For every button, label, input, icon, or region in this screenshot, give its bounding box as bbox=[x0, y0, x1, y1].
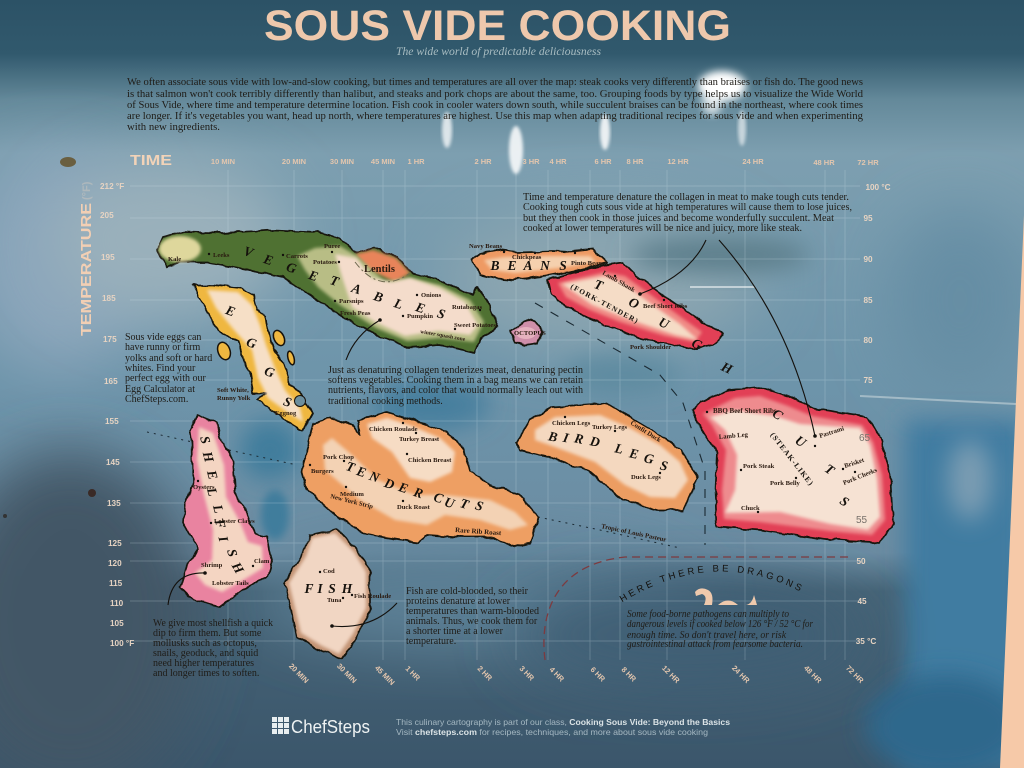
island: vegetables: Rutabagas bbox=[452, 304, 482, 311]
island: tough (fork-tender): G bbox=[689, 335, 705, 353]
island: tender cuts: U bbox=[442, 494, 458, 512]
temperature axis right bbox=[856, 183, 891, 646]
leader lines bbox=[168, 240, 817, 628]
time axis top: 4 HR bbox=[549, 157, 567, 166]
island: tender cuts: New York Strip bbox=[330, 493, 374, 511]
island: fish bbox=[285, 529, 391, 659]
text: shellfish note: and longer times to soften. bbox=[153, 668, 259, 679]
island: cuts (steak-like): BBQ Beef Short Ribs bbox=[713, 407, 777, 415]
temperature axis left: 105 bbox=[110, 619, 124, 628]
island: shellfish: H bbox=[199, 449, 217, 464]
text: dragons note: enough time. So don't travel here, or risk bbox=[627, 630, 787, 641]
time axis top: 48 HR bbox=[813, 158, 835, 167]
island: vegetables: Pumpkin bbox=[407, 313, 433, 320]
island: shellfish: Clam bbox=[254, 558, 270, 565]
time axis top: 2 HR bbox=[474, 157, 492, 166]
time axis top: 8 HR bbox=[626, 157, 644, 166]
text: shellfish note: mollusks such as octopus, bbox=[153, 638, 257, 649]
island: vegetables: Onions bbox=[421, 292, 442, 299]
island: bird legs: I bbox=[561, 430, 571, 446]
island: fish: I bbox=[316, 581, 323, 596]
time axis bottom: 6 HR bbox=[589, 665, 607, 684]
island: vegetables: L bbox=[391, 295, 405, 312]
island: vegetables: A bbox=[349, 280, 363, 297]
island: bird legs bbox=[517, 403, 698, 510]
temperature axis left: 120 bbox=[108, 559, 122, 568]
island: octopus bbox=[510, 320, 546, 345]
temperature axis left: 115 bbox=[109, 579, 123, 588]
temperature axis left: 165 bbox=[104, 377, 118, 386]
temperature axis left: 205 bbox=[100, 211, 114, 220]
temperature axis right: 100 °C bbox=[865, 183, 891, 192]
temperature axis left: 155 bbox=[105, 417, 119, 426]
island: fish: S bbox=[328, 581, 336, 596]
glare reflections bbox=[442, 71, 755, 287]
island: tough (fork-tender): Pork Shoulder bbox=[630, 344, 671, 351]
temperature axis right: 95 bbox=[863, 214, 873, 223]
temperature axis left: 145 bbox=[106, 458, 120, 467]
time axis top: TIME bbox=[130, 152, 172, 169]
island: beans: B bbox=[489, 258, 500, 273]
island: tender cuts: Rare Rib Roast bbox=[455, 526, 502, 537]
text: shellfish note bbox=[153, 618, 273, 679]
time axis top bbox=[130, 152, 879, 169]
island: shellfish: I bbox=[215, 533, 231, 544]
time axis bottom: 20 MIN bbox=[287, 661, 311, 685]
island: tough (fork-tender): Lamb Shank bbox=[601, 270, 636, 294]
island: cuts (steak-like): U bbox=[792, 432, 810, 451]
island: fish: Tuna bbox=[327, 597, 342, 604]
island: cuts (steak-like): Pork Steak bbox=[743, 463, 775, 470]
island: bird legs: Duck Legs bbox=[631, 474, 661, 481]
time axis top: 72 HR bbox=[857, 158, 879, 167]
island: shellfish bbox=[180, 415, 272, 607]
text: vegetables note: nutrients, flavors, and color that would normally leach out with bbox=[328, 385, 583, 396]
island: eggs: E bbox=[223, 302, 237, 319]
island: beans: E bbox=[506, 258, 517, 273]
island: tough (fork-tender): (FORK-TENDER) bbox=[569, 282, 641, 326]
text: dragons note: dangerous levels if cooked below 126 °F / 52 °C for bbox=[627, 619, 813, 630]
intro text: with new ingredients. bbox=[127, 122, 220, 133]
island: cuts (steak-like): C bbox=[770, 406, 786, 424]
island: tender cuts: Duck Roast bbox=[397, 504, 431, 511]
island: vegetables: Leeks bbox=[213, 252, 230, 259]
island: tender cuts: E bbox=[396, 479, 410, 496]
island: vegetables: Puree bbox=[324, 243, 340, 250]
island: beans: Navy Beans bbox=[469, 243, 503, 250]
text: eggs note: have runny or firm bbox=[125, 342, 200, 353]
island: vegetables: G bbox=[284, 259, 299, 276]
island: bird legs: L bbox=[612, 440, 625, 457]
island: tender cuts bbox=[302, 412, 538, 547]
island: cuts (steak-like): Pork Cheeks bbox=[842, 467, 879, 487]
island: fish: Cod bbox=[323, 568, 335, 575]
temperature axis right: 50 bbox=[856, 557, 866, 566]
text: tough cuts note: cooked at lower temperatures will be nice and juicy, more like steak. bbox=[523, 223, 802, 234]
island: fish: H bbox=[341, 581, 353, 596]
temperature axis left: 100 °F bbox=[110, 639, 134, 648]
island: fish: F bbox=[303, 581, 314, 596]
time axis top: 30 MIN bbox=[330, 157, 354, 166]
island: vegetables: Parsnips bbox=[339, 298, 364, 305]
island: bird legs: D bbox=[588, 433, 602, 450]
island: tender cuts: E bbox=[354, 463, 368, 480]
island: shellfish: Lobster Claws bbox=[214, 518, 255, 525]
temperature axis right: 90 bbox=[863, 255, 873, 264]
time axis top: 6 HR bbox=[594, 157, 612, 166]
island: cuts (steak-like): T bbox=[822, 461, 838, 478]
island: beans bbox=[469, 243, 607, 280]
text: fish note: temperature. bbox=[406, 636, 456, 647]
island: bird legs: S bbox=[659, 457, 669, 474]
island: shellfish: E bbox=[204, 468, 221, 481]
text: tough cuts note: but they then cook in those juices and become wonderfully succulent. Meat bbox=[523, 213, 834, 224]
island: tough (fork-tender): H bbox=[718, 358, 735, 377]
footer text: Visit chefsteps.com for recipes, techniques, and more about sous vide cooking bbox=[396, 727, 708, 737]
island: tough (fork-tender) bbox=[547, 263, 735, 377]
text: tough cuts note: Cooking tough cuts sous vide at high temperatures will cause them to lose juices, bbox=[523, 202, 852, 213]
island: beans: N bbox=[539, 258, 551, 273]
island: vegetables: E bbox=[413, 299, 427, 316]
text: eggs note: perfect egg with our bbox=[125, 373, 206, 384]
text: dragons note: gastrointestinal attack from fearsome bacteria. bbox=[627, 639, 803, 650]
island: tender cuts: R bbox=[411, 484, 425, 501]
intro text: We often associate sous vide with low-and-slow cooking, but times and temperatures are all over the map: steak cooks very differently than braises or fish do. The good news bbox=[127, 77, 863, 88]
island: shellfish: Shrimp bbox=[201, 562, 223, 569]
island: cuts (steak-like): Pork Belly bbox=[770, 480, 801, 487]
island: vegetables: Kale bbox=[168, 256, 181, 263]
time axis top: 10 MIN bbox=[211, 157, 235, 166]
island: beans: A bbox=[522, 258, 533, 273]
island: shellfish: H bbox=[228, 559, 247, 576]
island: eggs bbox=[193, 285, 313, 431]
island: shellfish: L bbox=[204, 485, 221, 498]
island: beans: Pinto Beans bbox=[571, 260, 605, 267]
island: cuts (steak-like): Lamb Leg bbox=[719, 431, 749, 441]
island: cuts (steak-like): 55 bbox=[856, 515, 868, 526]
text: dragons note: Some food-borne pathogens can multiply to bbox=[627, 609, 789, 620]
temperature axis left: 195 bbox=[101, 253, 115, 262]
text: fish note bbox=[406, 586, 539, 647]
island: vegetables: winter squash zone bbox=[420, 329, 466, 343]
island: cuts (steak-like): 65 bbox=[859, 433, 871, 444]
island: beans: Chickpeas bbox=[512, 254, 542, 261]
time axis bottom: 45 MIN bbox=[373, 663, 397, 687]
footer text bbox=[396, 717, 730, 737]
island: tender cuts: T bbox=[344, 458, 357, 475]
island: tender cuts: N bbox=[366, 468, 383, 486]
title: SOUS VIDE COOKING bbox=[264, 2, 731, 50]
time axis bottom: 48 HR bbox=[802, 664, 824, 685]
text: vegetables note: Just as denaturing collagen tenderizes meat, denaturing pectin bbox=[328, 365, 583, 376]
temperature axis right: 35 °C bbox=[856, 637, 876, 646]
temperature axis left: 125 bbox=[108, 539, 122, 548]
time axis bottom: 4 HR bbox=[548, 665, 566, 684]
island: vegetables bbox=[157, 230, 498, 353]
text: tough cuts note: Time and temperature denature the collagen in meat to make tough cuts tender. bbox=[523, 192, 849, 203]
text: shellfish note: We give most shellfish a quick bbox=[153, 618, 273, 629]
map grid bbox=[130, 170, 860, 660]
text: eggs note: yolks and soft or hard bbox=[125, 353, 212, 364]
here there be dragons heading: HERE THERE BE DRAGONS bbox=[619, 564, 802, 602]
island: cuts (steak-like): Chuck bbox=[741, 505, 760, 512]
text: dragons note bbox=[627, 609, 813, 650]
island: tender cuts: Chicken Breast bbox=[408, 457, 452, 464]
island: tender cuts: T bbox=[458, 495, 471, 512]
temperature axis left: 110 bbox=[110, 599, 124, 608]
subtitle: The wide world of predictable deliciousness bbox=[396, 46, 602, 58]
island: bird legs: B bbox=[546, 428, 559, 445]
island: eggs: G bbox=[244, 334, 259, 352]
text: tough cuts note bbox=[523, 192, 852, 234]
island: cuts (steak-like) bbox=[692, 387, 893, 543]
text: fish note: temperatures than warm-blooded bbox=[406, 606, 539, 617]
island: cuts (steak-like): S bbox=[837, 493, 852, 510]
temperature axis left: TEMPERATURE bbox=[78, 203, 95, 336]
island: eggs: Runny Yolk bbox=[217, 395, 251, 402]
temperature axis left: (°F) bbox=[81, 181, 93, 200]
island: vegetables: E bbox=[261, 251, 275, 268]
island: octopus: OCTOPUS bbox=[514, 330, 546, 337]
island: bird legs: Confit Duck bbox=[629, 420, 662, 444]
time axis bottom: 30 MIN bbox=[335, 661, 359, 685]
island: tough (fork-tender): Beef Short Ribs bbox=[643, 303, 688, 310]
temperature axis right: 75 bbox=[863, 376, 873, 385]
time axis bottom: 72 HR bbox=[844, 664, 866, 685]
island: cuts (steak-like): Pastrami bbox=[818, 425, 845, 440]
island: tender cuts: Turkey Breast bbox=[399, 436, 440, 443]
island: tough (fork-tender): U bbox=[656, 314, 673, 332]
text: shellfish note: dip to firm them. But some bbox=[153, 628, 262, 639]
island: fish: Fish Roulade bbox=[354, 593, 391, 600]
intro text bbox=[127, 77, 863, 133]
text: eggs note: whites. Find your bbox=[125, 363, 196, 374]
island: vegetables: V bbox=[242, 243, 256, 261]
island: cuts (steak-like): (STEAK-LIKE) bbox=[768, 431, 816, 488]
time axis bottom: 8 HR bbox=[620, 665, 638, 684]
intro text: are longer. If it's vegetables you want, head up north, where temperatures are highest. Use this map when adapting traditional recipes for sous vide and when experimenting bbox=[127, 111, 863, 122]
island: tender cuts: S bbox=[473, 497, 485, 514]
time axis bottom bbox=[287, 661, 866, 687]
text: vegetables note: traditional cooking methods. bbox=[328, 396, 443, 407]
temperature axis left: 135 bbox=[107, 499, 121, 508]
island: shellfish: S bbox=[197, 434, 214, 445]
time axis top: 3 HR bbox=[522, 157, 540, 166]
text: tropic of louis pasteur: Tropic of Louis Pasteur bbox=[601, 523, 667, 544]
time axis bottom: 2 HR bbox=[476, 664, 494, 683]
time axis bottom: 12 HR bbox=[660, 664, 682, 685]
island: tender cuts: C bbox=[432, 489, 446, 507]
island: beans: S bbox=[559, 258, 567, 273]
intro text: of Sous Vide, where time and temperature determine location. Fish cook in cooler waters down south, while succulent braises can be found in the northeast, where cook times bbox=[127, 100, 863, 111]
island: eggs: S bbox=[281, 393, 294, 410]
island: shellfish: L bbox=[210, 502, 227, 515]
time axis bottom: 1 HR bbox=[404, 664, 422, 683]
island: cuts (steak-like): Brisket bbox=[843, 457, 866, 470]
island: bird legs: E bbox=[627, 445, 640, 462]
island: shellfish: Lobster Tails bbox=[212, 580, 249, 587]
text: eggs note bbox=[125, 332, 212, 405]
time axis top: 20 MIN bbox=[282, 157, 306, 166]
temperature axis right: 45 bbox=[857, 597, 867, 606]
island: vegetables: Lentils bbox=[364, 264, 395, 275]
island: vegetables: Carrots bbox=[286, 253, 308, 260]
text: shellfish note: snails, geoduck, and squid bbox=[153, 648, 258, 659]
island: bird legs: Turkey Legs bbox=[592, 424, 628, 431]
text: fish note: proteins denature at lower bbox=[406, 596, 511, 607]
island: tender cuts: Burgers bbox=[311, 468, 334, 475]
island: tough (fork-tender): T bbox=[592, 276, 606, 293]
footer text: This culinary cartography is part of our class, Cooking Sous Vide: Beyond the Basics bbox=[396, 717, 730, 727]
temperature axis left: 185 bbox=[102, 294, 116, 303]
text: fish note: a shorter time at a lower bbox=[406, 626, 504, 637]
time axis bottom: 3 HR bbox=[518, 664, 536, 683]
temperature axis right: 85 bbox=[863, 296, 873, 305]
text: vegetables note: softens vegetables. Cooking them in a bag means we can retain bbox=[328, 375, 583, 386]
island: bird legs: R bbox=[572, 430, 585, 447]
island: vegetables: Potatoes bbox=[313, 259, 337, 266]
island: vegetables: B bbox=[371, 288, 385, 305]
island: tender cuts: Chicken Roulade bbox=[369, 426, 418, 433]
temperature axis right: 80 bbox=[863, 336, 873, 345]
time axis top: 12 HR bbox=[667, 157, 689, 166]
temperature axis left: 212 °F bbox=[100, 182, 124, 191]
food safety and tropic boundary lines bbox=[147, 303, 850, 660]
text: fish note: animals. Thus, we cook them for bbox=[406, 616, 538, 627]
icon: sea serpent bbox=[695, 588, 757, 605]
island: shellfish: F bbox=[212, 517, 229, 530]
island: vegetables: Fresh Peas bbox=[340, 310, 371, 317]
time axis top: 24 HR bbox=[742, 157, 764, 166]
island: shellfish: S bbox=[224, 547, 241, 558]
temperature axis left bbox=[78, 181, 134, 648]
text: vegetables note bbox=[328, 365, 583, 407]
island: eggs: Eggnog bbox=[275, 410, 297, 417]
time axis top: 45 MIN bbox=[371, 157, 395, 166]
island: tender cuts: Medium bbox=[340, 491, 364, 498]
intro text: is that salmon won't cook terribly differently than halibut, and steaks and pork chops are about the same, too. Grouping foods by type helps us to visualize the Wide World bbox=[127, 89, 863, 100]
time axis top: 1 HR bbox=[407, 157, 425, 166]
island: bird legs: Chicken Legs bbox=[552, 420, 591, 427]
island: tender cuts: D bbox=[381, 475, 397, 492]
island: bird legs: G bbox=[643, 450, 656, 467]
text: fish note: Fish are cold-blooded, so their bbox=[406, 586, 529, 597]
island: shellfish: Oysters bbox=[193, 484, 215, 491]
time axis bottom: 24 HR bbox=[730, 664, 752, 685]
island: vegetables: S bbox=[435, 305, 447, 322]
island: tough (fork-tender): O bbox=[626, 294, 642, 312]
island: vegetables: T bbox=[328, 272, 341, 289]
text: eggs note: ChefSteps.com. bbox=[125, 394, 188, 405]
island: tender cuts: Pork Chop bbox=[323, 454, 354, 461]
text: eggs note: Sous vide eggs can bbox=[125, 332, 201, 343]
island: vegetables: Sweet Potatoes bbox=[454, 322, 496, 329]
island: eggs: Soft White, bbox=[217, 387, 249, 394]
text: shellfish note: need higher temperatures bbox=[153, 658, 254, 669]
chefsteps logo: ChefSteps bbox=[291, 717, 370, 737]
temperature axis left: 175 bbox=[103, 335, 117, 344]
text: eggs note: Egg Calculator at bbox=[125, 384, 195, 395]
island: vegetables: E bbox=[306, 267, 320, 284]
island: eggs: G bbox=[262, 363, 277, 381]
